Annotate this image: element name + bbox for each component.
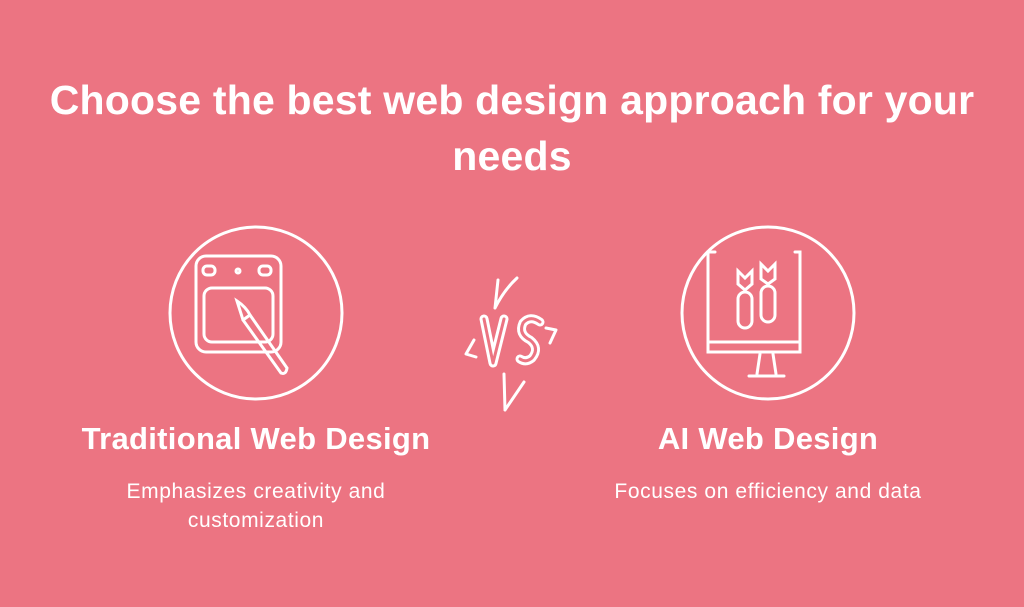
- heading: traditional: Traditional Web Design: [82, 421, 430, 456]
- text: traditional: customization: [188, 509, 324, 532]
- icon: drawing tablet: [168, 226, 344, 400]
- text: traditional: [127, 480, 385, 532]
- icon: vs: [464, 276, 558, 412]
- text: ai: Focuses on efficiency and data: [614, 480, 922, 503]
- heading: ai: AI Web Design: [658, 421, 878, 456]
- icon: monitor with rockets: [680, 226, 856, 400]
- text: traditional: Emphasizes creativity and: [127, 480, 385, 503]
- title: Choose the best web design approach for your: [50, 77, 974, 123]
- title: [50, 77, 974, 179]
- title: needs: [452, 133, 572, 179]
